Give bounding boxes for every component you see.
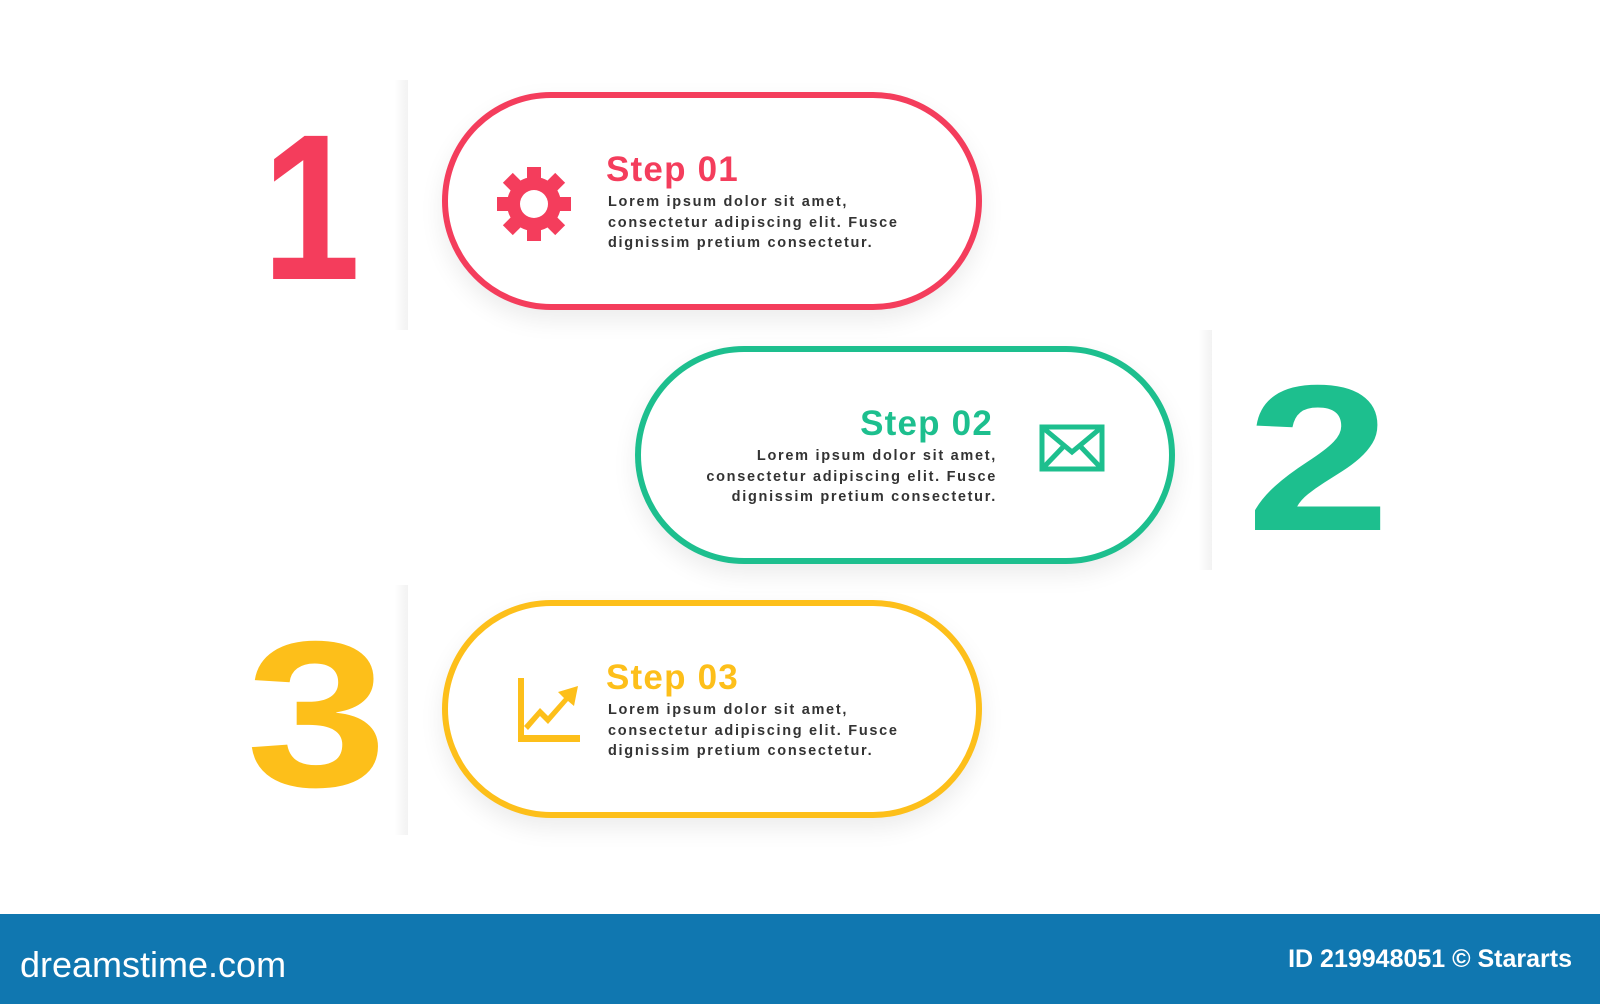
icon: envelope bbox=[1040, 424, 1104, 472]
footer logo: dreamstime.com bbox=[20, 944, 286, 985]
panel: step 01 bbox=[442, 92, 982, 310]
text block bbox=[608, 702, 899, 759]
text block: consectetur adipiscing elit. Fusce bbox=[608, 214, 899, 230]
heading: Step 01: Step 01 bbox=[606, 150, 739, 189]
text block: consectetur adipiscing elit. Fusce bbox=[706, 468, 997, 484]
text block: dignissim pretium consectetur. bbox=[608, 235, 873, 251]
footer bar bbox=[0, 914, 1600, 1004]
number 2: 2 bbox=[1246, 343, 1391, 575]
icon: chart bbox=[518, 678, 580, 742]
text block: Lorem ipsum dolor sit amet, bbox=[757, 448, 997, 464]
number 1: 1 bbox=[262, 92, 360, 324]
text block bbox=[608, 194, 899, 251]
text block: consectetur adipiscing elit. Fusce bbox=[608, 722, 899, 738]
text block bbox=[706, 448, 997, 505]
heading: Step 02: Step 02 bbox=[860, 404, 993, 443]
panel: step 03 bbox=[442, 600, 982, 818]
text block: dignissim pretium consectetur. bbox=[608, 743, 873, 759]
text block: Lorem ipsum dolor sit amet, bbox=[608, 194, 848, 210]
number 3: 3 bbox=[246, 599, 387, 831]
panel: step 02 bbox=[635, 346, 1175, 564]
footer id: ID 219948051 © Stararts bbox=[1288, 945, 1572, 973]
heading: Step 03: Step 03 bbox=[606, 658, 739, 697]
text block: dignissim pretium consectetur. bbox=[732, 489, 997, 505]
text block: Lorem ipsum dolor sit amet, bbox=[608, 702, 848, 718]
icon: gear bbox=[497, 167, 571, 241]
